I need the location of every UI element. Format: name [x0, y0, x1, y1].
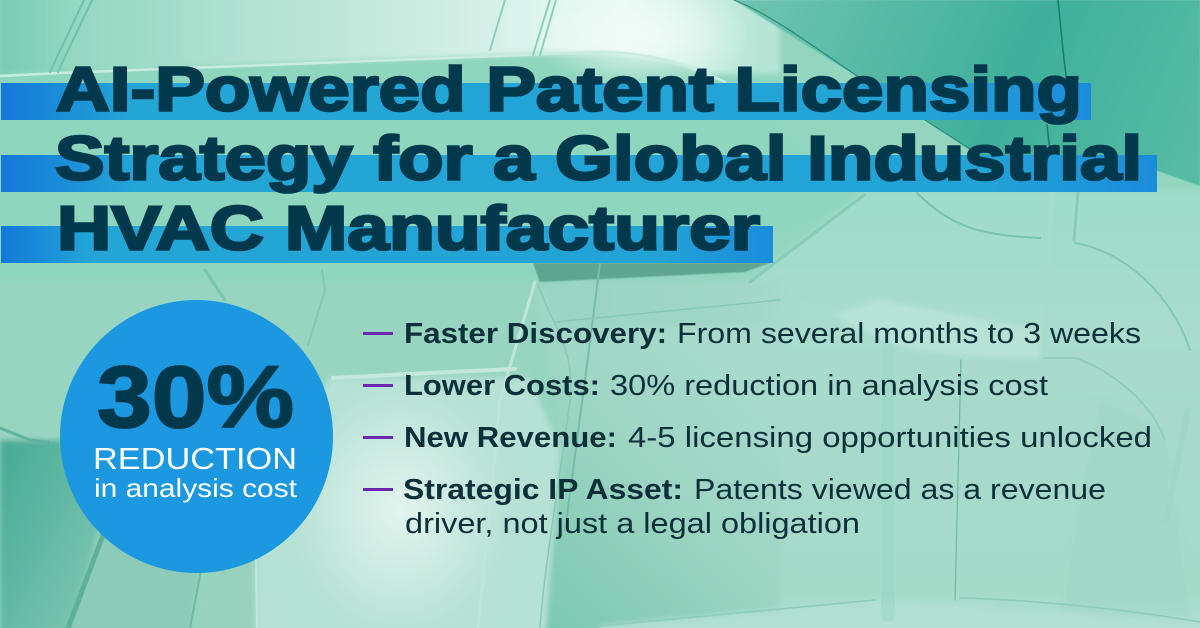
bullet: lower costs: Lower Costs:	[404, 370, 600, 402]
shaded bend right	[1060, 400, 1190, 620]
bullet: strategic IP asset: driver, not just a legal obligation	[405, 508, 860, 540]
light lower middle panel	[256, 378, 560, 628]
bullet: lower costs	[363, 370, 1048, 402]
title line 1: AI-Powered Patent Licensing	[56, 56, 1082, 125]
bullet: faster discovery	[363, 318, 1141, 350]
stat label: REDUCTION	[93, 442, 297, 476]
dark ceiling corner	[734, 0, 1200, 186]
highlight bar 3	[1, 226, 773, 263]
bullet: new revenue	[363, 422, 1152, 454]
highlight bar 2	[1, 155, 1157, 192]
bullet: faster discovery: Faster Discovery:	[404, 318, 667, 350]
bullet: strategic IP asset: Patents viewed as a revenue	[694, 474, 1106, 506]
stat sublabel: in analysis cost	[94, 473, 298, 503]
bullet: faster discovery: From several months to 3 weeks	[677, 318, 1141, 350]
light underside of upper duct	[833, 300, 1040, 358]
bullet: new revenue: 4-5 licensing opportunities unlocked	[628, 422, 1152, 454]
dark gap beneath duct	[533, 263, 770, 282]
bullet: strategic IP asset	[363, 474, 1106, 540]
left panel	[0, 280, 540, 378]
bright glows	[290, 0, 750, 628]
bullet: new revenue: New Revenue:	[404, 422, 617, 454]
lower right duct	[740, 190, 1200, 628]
bullet: lower costs: 30% reduction in analysis cost	[610, 370, 1048, 402]
highlight bar 1	[1, 83, 1091, 120]
stat value: 30%	[97, 349, 294, 446]
lower center panel	[535, 282, 780, 628]
title line 2: Strategy for a Global Industrial	[55, 125, 1142, 194]
bullet: strategic IP asset: Strategic IP Asset:	[403, 474, 683, 506]
title line 3: HVAC Manufacturer	[57, 195, 760, 264]
